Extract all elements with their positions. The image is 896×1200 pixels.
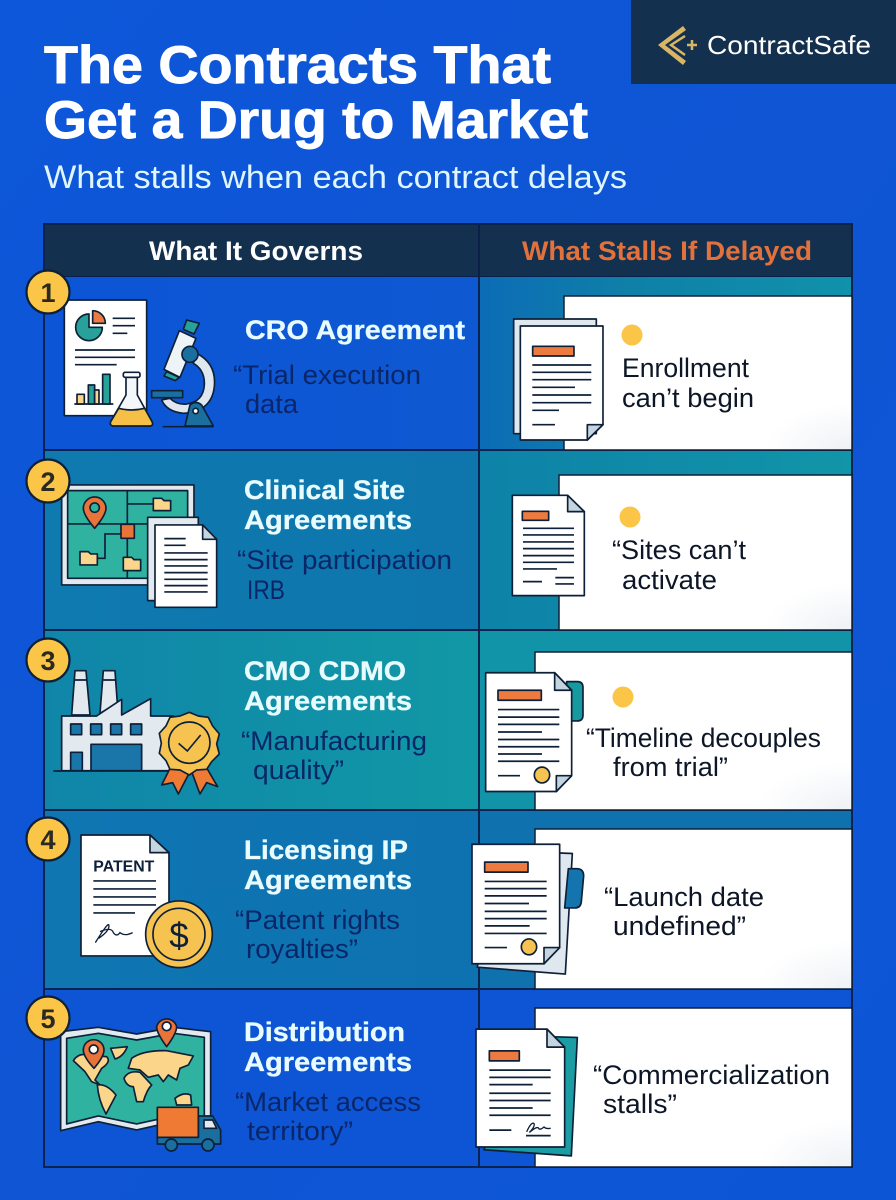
number badge 4: 4 [40, 825, 56, 855]
stall text: “Commercialization [593, 1060, 830, 1090]
icon: document [512, 495, 584, 596]
number badge 2 [26, 460, 70, 502]
heading: CRO Agreement [245, 315, 465, 345]
stall text: undefined” [613, 911, 746, 941]
stall text: stalls” [603, 1089, 677, 1119]
icon: patent document and coin [81, 835, 212, 968]
icon: signed document [476, 1029, 577, 1156]
panel: row 5 stall card [476, 1008, 852, 1167]
row 2 backgrounds [44, 450, 852, 630]
icon: patent document and coin: PATENT [93, 859, 155, 876]
description [235, 1087, 421, 1146]
description: quality” [253, 755, 344, 785]
icon: patent document and coin: $ [169, 916, 189, 955]
row 4 content [81, 835, 412, 968]
heading: CMO CDMO [244, 656, 406, 686]
description: IRB [247, 575, 285, 605]
row 2 content [62, 475, 452, 607]
stall text: “Launch date [604, 882, 764, 912]
title: Get a Drug to Market [44, 91, 588, 150]
number badge 3 [26, 638, 70, 682]
number badge 3: 3 [40, 646, 56, 676]
row 3 content [53, 656, 427, 794]
stall text [586, 723, 821, 782]
heading: Agreements [244, 505, 412, 535]
description [237, 545, 452, 605]
description [233, 360, 421, 419]
icon: stacked document [514, 319, 603, 440]
icon: document with tab [472, 844, 584, 974]
heading: Licensing IP [244, 835, 408, 865]
bullet dot [620, 506, 640, 528]
panel: row 3 stall card [486, 652, 852, 810]
number badge 1: 1 [40, 278, 56, 308]
stall text [622, 353, 754, 413]
title [44, 36, 588, 150]
row 1 backgrounds [44, 277, 852, 450]
logo: ContractSafe: ContractSafe [707, 30, 871, 60]
heading [244, 475, 412, 535]
stall text: Enrollment [622, 353, 750, 383]
heading [244, 1017, 412, 1077]
panel: row 2 stall card [512, 475, 852, 630]
number badge 4 [26, 818, 70, 860]
number badge 5 [26, 996, 70, 1040]
stall text [604, 882, 764, 941]
row 3 backgrounds [44, 630, 852, 810]
heading: Agreements [244, 686, 412, 716]
stall text [612, 535, 747, 595]
row 5 backgrounds [44, 989, 852, 1167]
stall text: can’t begin [622, 383, 754, 413]
row 1 content [64, 300, 465, 427]
stall text: from trial” [613, 752, 728, 782]
panel: row 1 stall card [514, 296, 852, 450]
number badge 2: 2 [40, 467, 56, 497]
description: data [245, 389, 298, 419]
number badge 5: 5 [40, 1004, 56, 1034]
description: “Trial execution [233, 360, 421, 390]
number badge 1 [26, 270, 70, 314]
description: “Patent rights [235, 905, 400, 935]
subtitle: What stalls when each contract delays [44, 159, 627, 195]
description: royalties” [246, 934, 358, 964]
description: “Site participation [237, 545, 452, 575]
stall text: “Sites can’t [612, 535, 747, 565]
table header: What Stalls If Delayed [522, 236, 812, 266]
icon: document with seal [486, 673, 583, 792]
icon: site map and documents [62, 485, 217, 607]
heading [244, 835, 412, 895]
stall text [593, 1060, 830, 1119]
description [241, 726, 427, 785]
description: “Manufacturing [241, 726, 427, 756]
table header: What It Governs [149, 236, 363, 266]
heading: Clinical Site [244, 475, 405, 505]
heading: Distribution [244, 1017, 405, 1047]
row 5 content [61, 1017, 421, 1151]
table header [44, 224, 852, 277]
icon: report, flask and microscope [64, 300, 215, 427]
bullet dot [622, 324, 642, 346]
row 4 backgrounds [44, 810, 852, 989]
icon: factory with quality medal [53, 671, 219, 794]
heading: Agreements [244, 1047, 412, 1077]
heading [244, 656, 412, 716]
description: territory” [247, 1116, 353, 1146]
icon: world map with pins and truck [61, 1019, 221, 1151]
title: The Contracts That [44, 36, 551, 95]
description [235, 905, 400, 964]
panel: row 4 stall card [472, 829, 852, 989]
bullet dot [612, 686, 634, 708]
stall text: “Timeline decouples [586, 723, 821, 753]
table grid [44, 224, 852, 1167]
description: “Market access [235, 1087, 421, 1117]
stall text: activate [622, 565, 717, 595]
logo: ContractSafe [631, 0, 896, 84]
heading: Agreements [244, 865, 412, 895]
